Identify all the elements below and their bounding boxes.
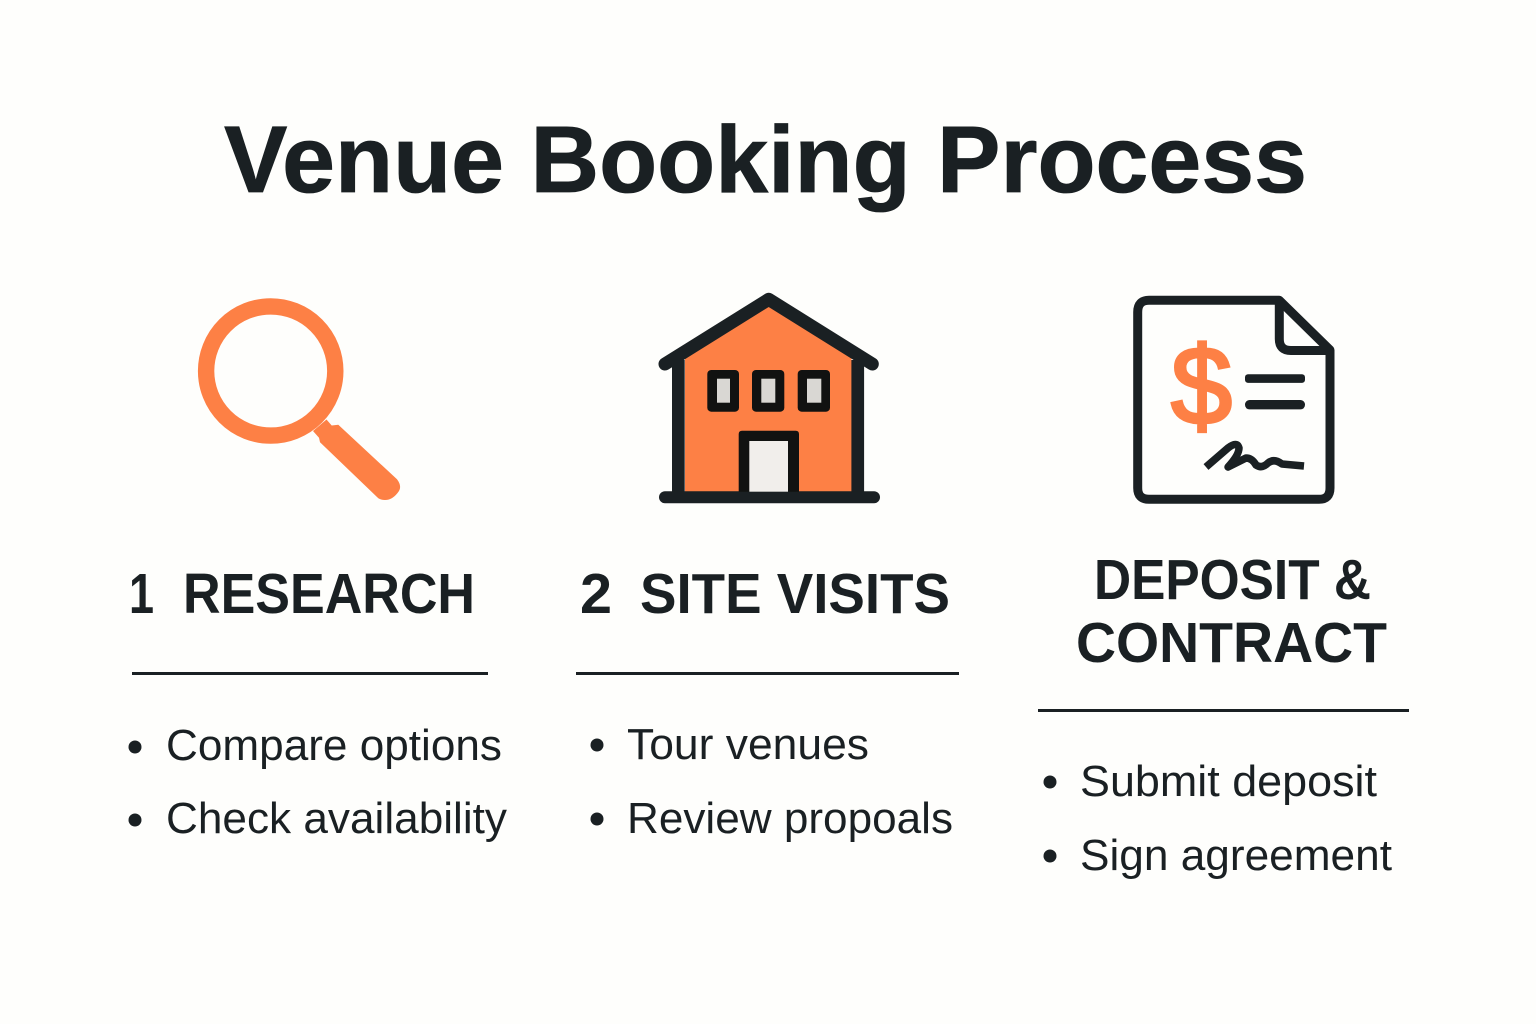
list: research tasks: Compare options	[166, 722, 502, 770]
list: site visit tasks: Review propoals	[627, 795, 953, 843]
heading: 1 research: RESEARCH	[183, 562, 475, 626]
list: research tasks	[128, 722, 507, 843]
heading: 2 site visits: 2	[580, 562, 612, 626]
list: site visit tasks: Tour venues	[627, 721, 869, 769]
heading: 1 research: 1	[129, 562, 154, 626]
icon: contract document: $	[1171, 325, 1232, 448]
list: deposit tasks: Sign agreement	[1080, 832, 1392, 880]
list: deposit tasks: Submit deposit	[1080, 758, 1377, 806]
heading: 2 site visits: SITE VISITS	[640, 562, 950, 626]
heading: deposit and contract	[1076, 548, 1387, 675]
panel: site visits	[576, 299, 959, 843]
panel: deposit and contract	[1038, 300, 1409, 880]
icon: magnifying glass	[206, 306, 400, 500]
icon: contract document	[1138, 300, 1330, 499]
list: research tasks: Check availability	[166, 795, 507, 843]
list: deposit tasks	[1044, 758, 1392, 880]
heading: deposit and contract: DEPOSIT &	[1094, 548, 1371, 612]
title: Venue Booking Process	[224, 107, 1307, 213]
list: site visit tasks	[590, 721, 953, 843]
icon: venue building	[659, 299, 880, 503]
heading: deposit and contract: CONTRACT	[1076, 611, 1387, 675]
panel: research	[128, 306, 507, 843]
